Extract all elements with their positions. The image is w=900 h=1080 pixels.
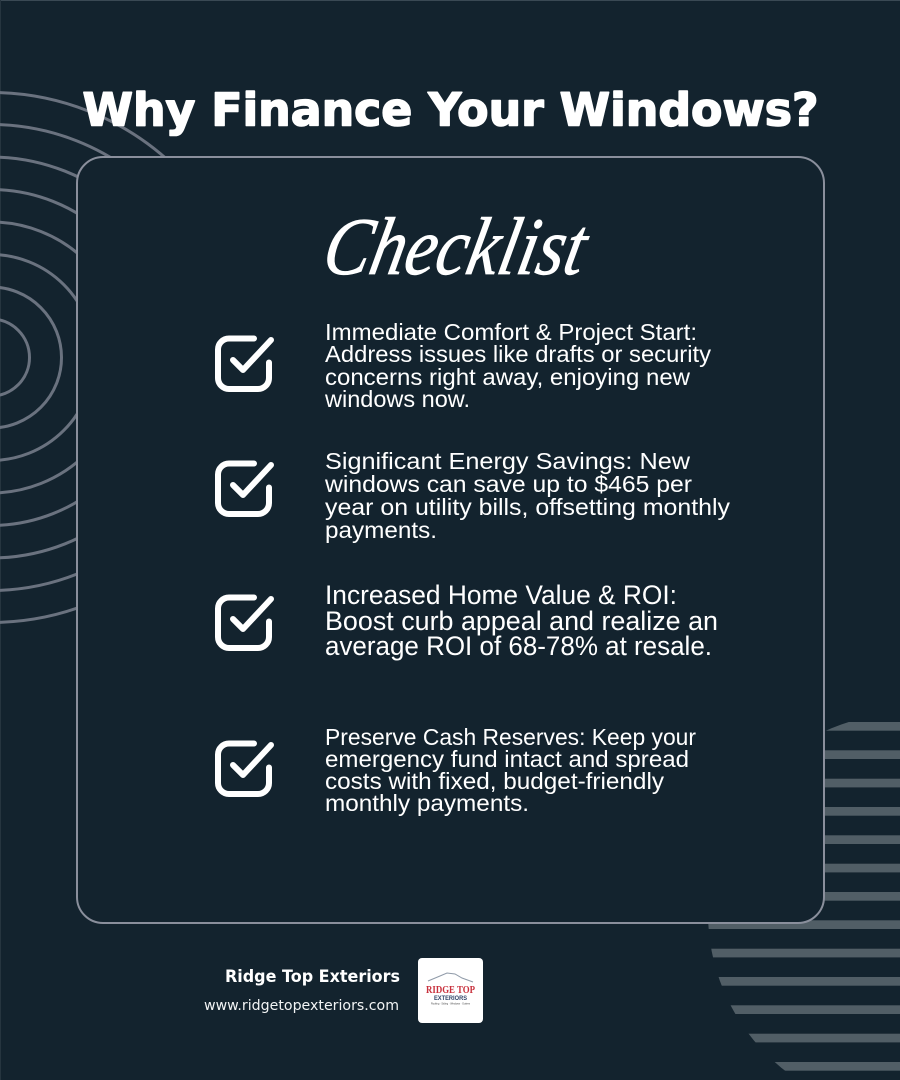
text: immediate comfort (324, 319, 711, 412)
logo (418, 958, 483, 1023)
text: cash reserves: monthly payments. (325, 790, 529, 816)
text: energy savings: payments. (325, 517, 437, 543)
footer: website: www.ridgetopexteriors.com (204, 998, 399, 1014)
icon: checkbox 1 (218, 338, 271, 389)
item 1: comfort (218, 319, 711, 412)
icon: checkbox 2 (218, 464, 271, 514)
item 3: home value (218, 580, 718, 661)
logo: EXTERIORS (434, 995, 468, 1002)
item 4: cash reserves (218, 724, 696, 816)
text: energy savings (324, 448, 730, 543)
text: energy savings: year on utility bills, offsetting monthly (325, 494, 730, 520)
text: immediate comfort: windows now. (324, 386, 470, 412)
title: Why Finance Your Windows? (82, 84, 819, 136)
decorative concentric rings (0, 92, 256, 622)
text: cash reserves: emergency fund intact and spread (325, 746, 689, 772)
checklist heading: Checklist (316, 201, 597, 292)
text: energy savings: Significant Energy Savings: New (325, 448, 691, 474)
text: home value: average ROI of 68-78% at resale. (325, 631, 712, 661)
text: immediate comfort: Immediate Comfort & Project Start: (325, 319, 697, 345)
text: immediate comfort: Address issues like drafts or security (325, 341, 711, 367)
text: immediate comfort: concerns right away, enjoying new (325, 364, 691, 390)
text: home value: Boost curb appeal and realize an (325, 606, 718, 636)
text: cash reserves: Preserve Cash Reserves: Keep your (325, 724, 696, 750)
text: home value: Increased Home Value & ROI: (325, 580, 677, 610)
item 2: energy savings (218, 448, 730, 543)
text: home value (325, 580, 718, 661)
logo: RIDGE TOP (426, 985, 475, 996)
footer: company name: Ridge Top Exteriors (225, 967, 400, 986)
text: energy savings: windows can save up to $465 per (324, 471, 692, 497)
panel: checklist card (77, 157, 824, 923)
icon: checkbox 4 (218, 744, 271, 794)
text: cash reserves (325, 724, 696, 816)
logo: Roofing · Siding · Windows · Gutters (431, 1002, 470, 1006)
text: cash reserves: costs with fixed, budget-friendly (325, 768, 664, 794)
decorative striped circle (700, 722, 900, 1071)
icon: checkbox 3 (218, 598, 271, 648)
